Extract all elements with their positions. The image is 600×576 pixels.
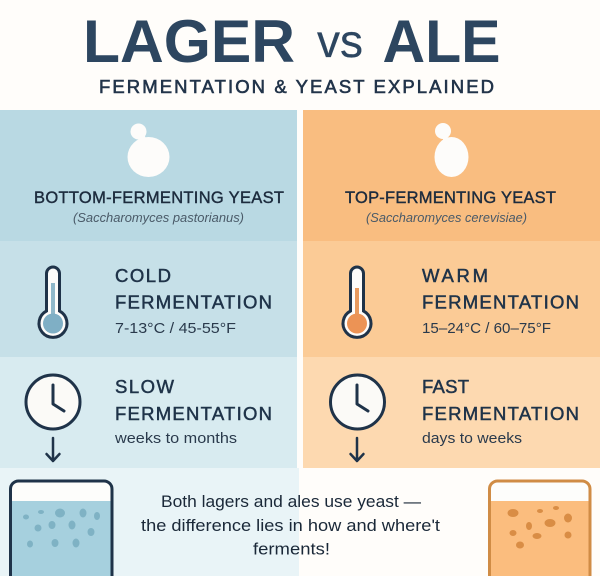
slow fermentation text: FERMENTATION (115, 403, 272, 424)
lager yeast sediment (23, 508, 100, 548)
ale yeast row background (303, 110, 600, 241)
footer message: ferments! (253, 540, 330, 558)
slow fermentation text: SLOW (115, 376, 175, 397)
slow fermentation text: weeks to months (114, 430, 237, 447)
arrow: down to ale glass (350, 438, 364, 461)
icon: fast clock (330, 375, 384, 429)
fast fermentation text: days to weeks (422, 430, 522, 447)
fast fermentation text: FERMENTATION (422, 403, 579, 424)
icon: cold thermometer (39, 267, 67, 337)
lager yeast row background (0, 110, 297, 241)
footer message: the difference lies in how and where't (141, 516, 440, 535)
lager yeast heading: BOTTOM-FERMENTING YEAST (34, 189, 284, 207)
warm fermentation text (422, 265, 579, 337)
lager yeast species: (Saccharomyces pastorianus) (73, 211, 244, 225)
ale yeast heading: TOP-FERMENTING YEAST (345, 189, 556, 207)
title: LAGER (83, 8, 295, 75)
ale yeast species: (Saccharomyces cerevisiae) (366, 211, 527, 225)
subtitle: FERMENTATION & YEAST EXPLAINED (99, 76, 494, 97)
footer background (0, 468, 299, 576)
fast fermentation text (422, 376, 579, 447)
cold fermentation text: 7-13°C / 45-55°F (115, 320, 236, 337)
cold fermentation text: COLD (115, 265, 171, 286)
arrow: down to lager glass (46, 438, 60, 461)
ale temperature row background (303, 241, 600, 357)
icon: slow clock (26, 375, 80, 429)
footer message: Both lagers and ales use yeast — (161, 492, 421, 511)
lager time row background (0, 357, 297, 468)
title: vs (317, 15, 363, 67)
panel: ale (303, 110, 600, 468)
icon: bottom-fermenting yeast cell (128, 124, 170, 177)
ale yeast flecks (508, 506, 572, 548)
cold fermentation text (115, 265, 272, 337)
warm fermentation text: 15–24°C / 60–75°F (422, 320, 551, 337)
icon: ale glass (490, 481, 590, 576)
lager temperature row background (0, 241, 297, 357)
title (83, 8, 500, 75)
icon: warm thermometer (343, 267, 371, 337)
icon: lager glass (10, 481, 112, 576)
fast fermentation text: FAST (422, 376, 469, 397)
slow fermentation text (114, 376, 272, 447)
panel: lager (0, 110, 297, 468)
title: ALE (382, 8, 500, 75)
footer message (141, 492, 440, 558)
icon: top-fermenting yeast cell (434, 123, 468, 177)
warm fermentation text: WARM (422, 265, 488, 286)
ale time row background (303, 357, 600, 468)
warm fermentation text: FERMENTATION (422, 292, 579, 312)
cold fermentation text: FERMENTATION (115, 292, 272, 312)
